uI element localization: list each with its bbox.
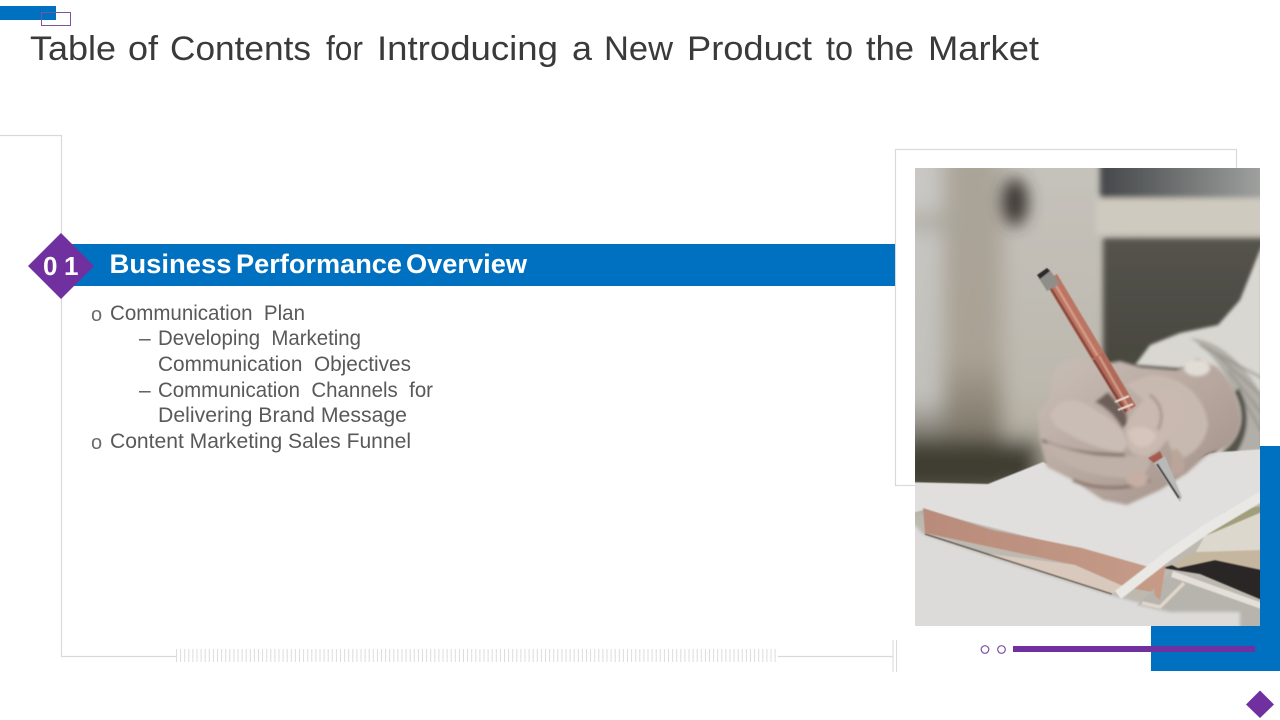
title: Table bbox=[30, 30, 116, 68]
photo outline frame bbox=[896, 150, 1236, 486]
title: for bbox=[326, 30, 363, 68]
title: Introducing bbox=[377, 30, 558, 68]
lower cloth bbox=[915, 524, 1140, 626]
pen bbox=[1036, 268, 1110, 363]
section heading: Performance bbox=[236, 249, 402, 279]
title bbox=[30, 30, 1040, 68]
title: Market bbox=[928, 30, 1040, 68]
title: New bbox=[604, 30, 673, 68]
title: the bbox=[866, 30, 914, 68]
section heading: Overview bbox=[406, 249, 528, 279]
bottom right diamond bbox=[1246, 690, 1274, 718]
contents list: Content Marketing Sales Funnel bbox=[110, 430, 411, 453]
frame end double bar bbox=[893, 640, 896, 672]
top accent: purple outline box bbox=[42, 12, 70, 26]
contents list: – bbox=[139, 379, 151, 402]
contents list: Communication Plan bbox=[110, 302, 305, 325]
contents list: o bbox=[91, 432, 102, 454]
contents list: Communication Channels for bbox=[158, 379, 433, 402]
contents list: – bbox=[139, 327, 151, 350]
contents list: Delivering Brand Message bbox=[158, 404, 407, 427]
book right side bbox=[1118, 496, 1262, 626]
blue corner block bbox=[1151, 446, 1280, 671]
title: a bbox=[572, 30, 592, 68]
purple accent bar bbox=[1013, 646, 1255, 652]
section number diamond: 0 bbox=[43, 251, 57, 281]
decorative circles bbox=[981, 646, 1005, 653]
title: Product bbox=[687, 30, 813, 68]
title: of bbox=[128, 30, 159, 68]
top accent: blue bar bbox=[0, 6, 56, 20]
photo: hand writing in notebook bbox=[915, 168, 1260, 626]
sweater sleeve bbox=[1135, 245, 1262, 458]
title: to bbox=[826, 30, 853, 68]
section number diamond: 1 bbox=[64, 251, 78, 281]
section heading bar bbox=[62, 244, 895, 286]
title: Contents bbox=[170, 30, 311, 68]
section heading: Business bbox=[110, 249, 232, 279]
thumb bbox=[1124, 394, 1167, 457]
book edge bbox=[923, 508, 1157, 594]
contents list: o bbox=[91, 304, 102, 326]
section number diamond bbox=[28, 233, 94, 299]
frame tick strip bbox=[176, 649, 778, 662]
contents list: Developing Marketing bbox=[158, 327, 361, 350]
contents list bbox=[91, 302, 433, 454]
bottom cloth tip bbox=[1130, 604, 1242, 626]
hand bbox=[1038, 358, 1240, 505]
contents list: Communication Objectives bbox=[158, 353, 411, 376]
section heading bbox=[110, 249, 528, 279]
left frame outline bbox=[0, 136, 893, 656]
notebook pages bbox=[905, 449, 1262, 568]
pen ring and lower barrel bbox=[1092, 352, 1182, 502]
